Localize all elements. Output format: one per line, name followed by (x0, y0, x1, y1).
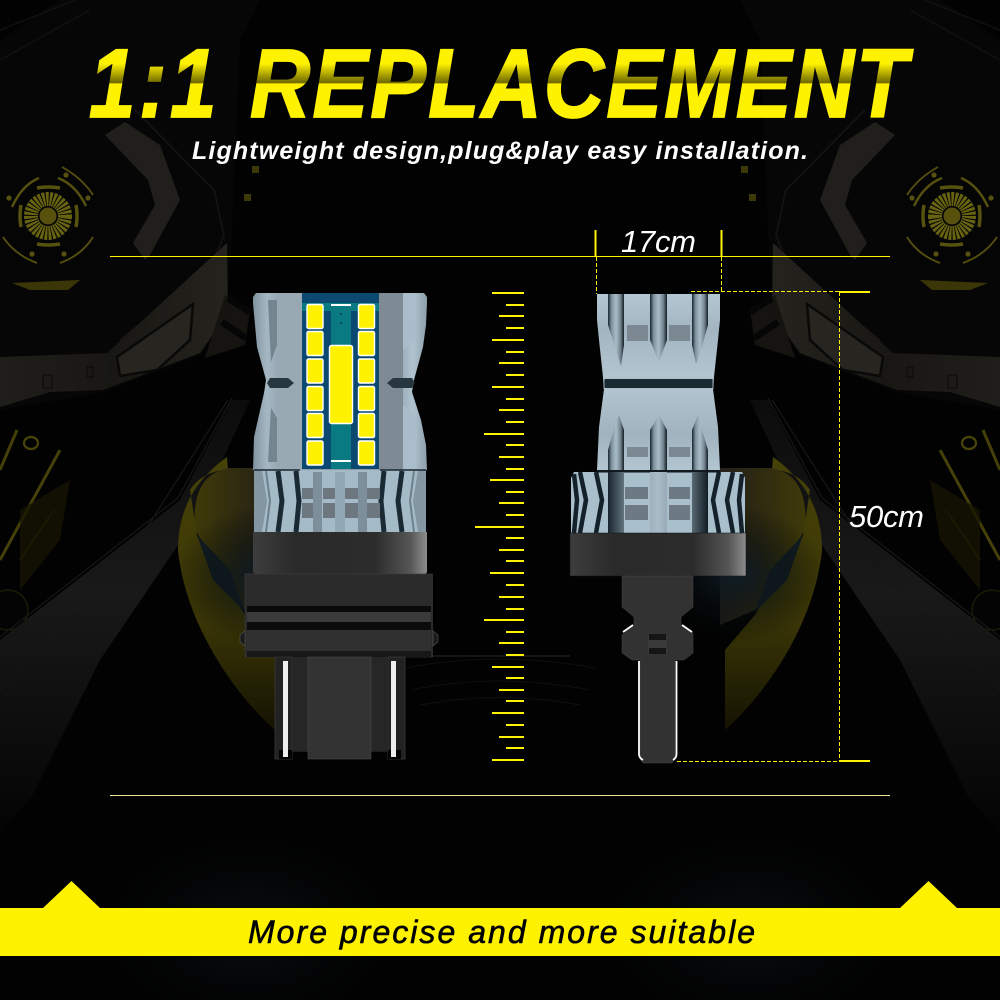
bulb body: upper metal housing (253, 293, 427, 470)
bulb: side view (570, 294, 746, 763)
connector pins (275, 657, 405, 759)
side neck and stem (622, 576, 693, 763)
title: REPLACEMENT (250, 30, 913, 138)
dimension: 17cm width (596, 224, 722, 294)
side clip mark (648, 634, 667, 654)
connector base (240, 574, 438, 657)
ruler ticks (475, 293, 524, 760)
bulb: front view with LEDs (240, 293, 438, 759)
side body: ribs (608, 294, 708, 470)
frame line: bottom (110, 795, 890, 796)
side fins (571, 470, 745, 533)
side body: dark waist band (604, 378, 713, 388)
bulb fins (254, 470, 426, 532)
bottom banner (0, 881, 1000, 956)
circuit board (302, 293, 379, 469)
LED: centre bar (330, 346, 352, 424)
icon: housing notch right (387, 378, 415, 388)
title: 1:1 (89, 30, 220, 138)
banner text: More precise and more suitable (248, 914, 755, 950)
subtitle: Lightweight design,plug&play easy installation. (192, 137, 808, 165)
LEDs: right column (358, 304, 374, 465)
bulb collar (253, 532, 427, 574)
side collar (570, 533, 746, 576)
circuit board: teal strips (302, 303, 379, 469)
icon: housing notch left (267, 378, 294, 388)
dimension: 50cm height (677, 292, 924, 762)
LEDs: left column (307, 304, 323, 465)
side wires (639, 661, 676, 760)
side body: metal housing (597, 294, 720, 470)
frame line: top (110, 256, 890, 257)
label: 17cm: 17cm (621, 224, 696, 259)
label: 50cm: 50cm (849, 499, 924, 534)
